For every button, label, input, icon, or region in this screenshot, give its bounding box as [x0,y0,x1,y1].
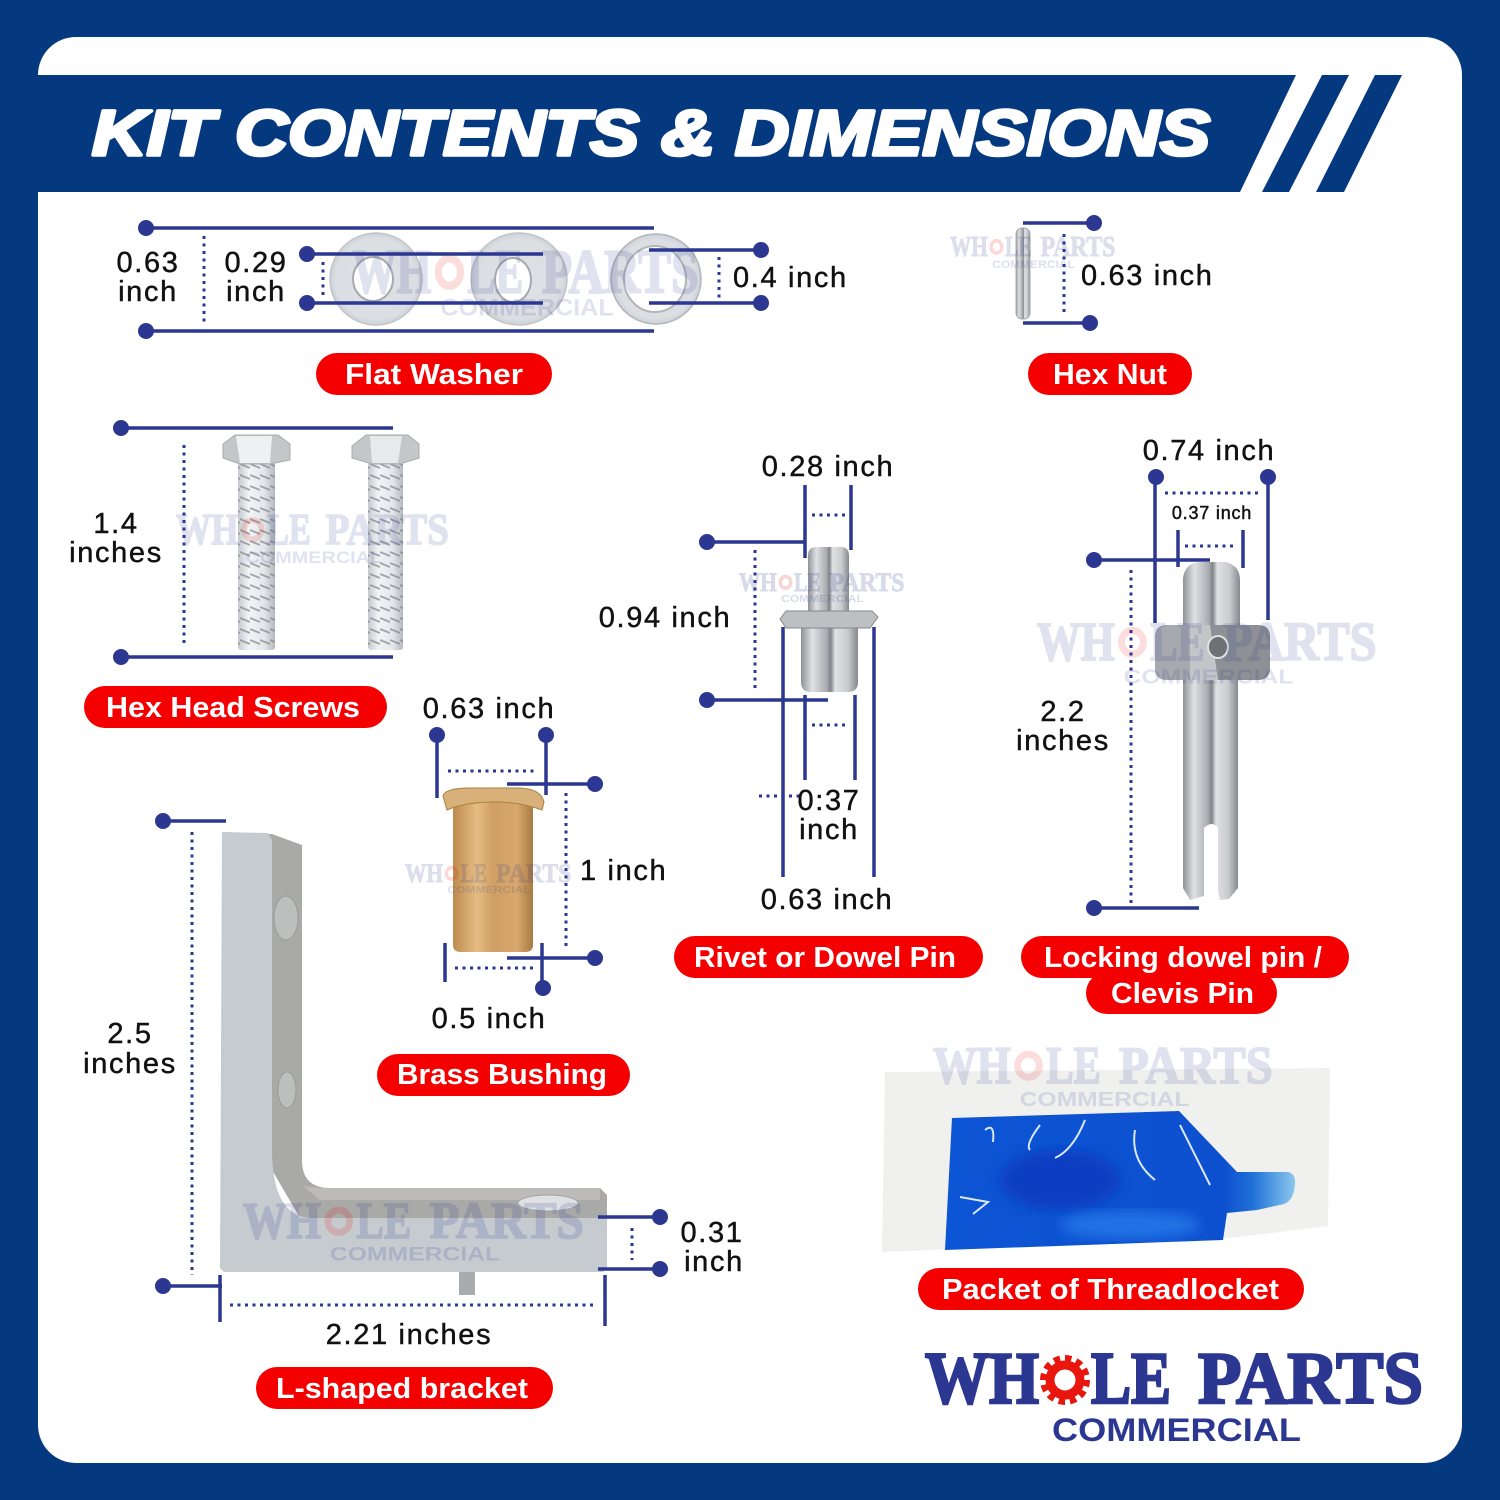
label: flat washer: Flat Washer [345,359,523,391]
watermark: locking pin: COMMERCIAL [1124,666,1293,689]
watermark: bushing: PARTS [496,858,571,888]
dimensions: flat washer [116,220,848,339]
dimensions: hex head screws: 1.4 [93,508,139,540]
banner band [38,75,1296,192]
watermark: locking pin: WH [1037,612,1115,672]
part photo: flat washers [330,233,701,325]
logo: Whole Parts Commercial: WH [925,1338,1039,1420]
dimensions: L-shaped bracket: 2.21 inches [326,1319,492,1351]
dimensions: rivet or dowel pin: inch [799,814,859,846]
label: packet of threadlocket: Packet of Threadlocket [942,1274,1279,1306]
watermark: hex nut [950,230,1115,271]
watermark: rivet: LE [794,567,821,597]
watermark: packet: LE [1046,1037,1101,1095]
label: rivet or dowel pin [674,936,983,978]
watermark: rivet: COMMERCIAL [781,593,864,605]
title [92,97,1210,169]
dimensions: locking dowel pin: 2.2 [1040,696,1086,728]
title: KIT [92,97,220,169]
label: L-shaped bracket [256,1367,553,1409]
watermark: packet [933,1037,1273,1111]
watermark: rivet: PARTS [830,567,904,597]
dimensions: locking dowel pin [1016,435,1276,916]
dimensions: L-shaped bracket: inches [83,1048,177,1080]
part photo: L-shaped bracket [220,832,607,1295]
watermark: locking pin: LE [1150,612,1205,672]
dimensions: locking dowel pin: 0.74 inch [1143,435,1275,467]
dimensions: flat washer: inch [118,276,178,308]
watermark: hex nut: WH [950,230,988,262]
banner stripes [1262,75,1402,192]
dimensions: flat washer: 0.29 [224,247,288,279]
label: hex head screws: Hex Head Screws [106,692,360,724]
watermark: flat washers: LE [468,238,523,307]
watermark: packet: PARTS [1119,1037,1273,1095]
part photo: hex nut pin [1016,228,1030,319]
label: L-shaped bracket: L-shaped bracket [276,1373,528,1405]
watermark: bracket [243,1192,584,1265]
dimensions: rivet or dowel pin: 0.28 inch [762,451,894,483]
label: flat washer [316,353,552,395]
label: locking dowel pin / clevis pin [1021,936,1349,1014]
dimensions: hex nut [1023,215,1214,331]
watermark: bushing [405,858,571,896]
logo: Whole Parts Commercial [925,1338,1423,1448]
dimensions: brass bushing: 1 inch [580,855,667,887]
watermark: flat washers: WH [352,238,431,307]
part photo: locking dowel pin [1155,562,1270,900]
dimensions: hex head screws [69,420,393,665]
label: rivet or dowel pin: Rivet or Dowel Pin [694,942,956,974]
part photo: rivet or dowel pin [780,547,878,692]
dimensions: rivet or dowel pin: 0.63 inch [761,884,893,916]
watermark: screws: PARTS [326,505,449,554]
watermark: locking pin [1037,612,1377,689]
watermark: bracket: LE [357,1192,411,1250]
label: locking dowel pin / clevis pin: Locking dowel pin / [1044,942,1322,974]
dimensions: rivet or dowel pin: 0:37 [797,785,861,817]
watermark: screws: LE [267,505,311,554]
dimensions: hex nut: 0.63 inch [1081,260,1214,292]
dimensions: L-shaped bracket: 0.31 [680,1217,744,1249]
title: & [661,97,715,169]
dimensions: brass bushing: 0.63 inch [423,693,555,725]
watermark: rivet: WH [739,567,777,597]
dimensions: locking dowel pin: inches [1016,725,1110,757]
watermark: hex nut: LE [1005,230,1032,262]
dimensions: L-shaped bracket [83,813,744,1351]
dimensions: flat washer: 0.4 inch [733,262,848,294]
watermark: flat washers: PARTS [542,238,699,307]
watermark: bushing: LE [460,858,487,888]
watermark: packet: COMMERCIAL [1020,1089,1189,1111]
logo: Whole Parts Commercial: LE [1091,1338,1171,1420]
watermark: screws: WH [176,505,238,554]
dimensions: L-shaped bracket: inch [684,1246,744,1278]
icon: gear [1043,1358,1087,1402]
title: CONTENTS [235,97,639,169]
watermark: flat washers: COMMERCIAL [440,294,614,321]
watermark: hex nut: COMMERCIAL [992,260,1075,271]
watermark: bracket: WH [243,1192,321,1250]
label: packet of threadlocket [918,1268,1304,1310]
dimensions: brass bushing: 0.5 inch [432,1003,546,1035]
dimensions: L-shaped bracket: 2.5 [107,1018,153,1050]
dimensions: rivet or dowel pin [599,451,894,916]
watermark: packet: WH [933,1037,1011,1095]
title: DIMENSIONS [735,97,1210,169]
watermark: bushing: COMMERCIAL [447,885,531,896]
dimensions: locking dowel pin: 0.37 inch [1172,503,1252,523]
part photo: hex head screws [223,435,419,650]
watermark: locking pin: PARTS [1223,612,1377,672]
dimensions: brass bushing [423,693,667,1035]
watermark: bracket: COMMERCIAL [330,1243,500,1265]
label: hex nut [1028,353,1192,395]
label: locking dowel pin / clevis pin: Clevis Pin [1111,978,1254,1010]
dimensions: flat washer: inch [226,276,286,308]
logo: Whole Parts Commercial: COMMERCIAL [1052,1412,1301,1448]
part photo: brass bushing [443,788,544,952]
label: hex nut: Hex Nut [1053,359,1167,391]
label: brass bushing: Brass Bushing [397,1059,607,1091]
dimensions: flat washer: 0.63 [116,247,180,279]
part photo: packet of threadlocker [882,1068,1330,1252]
watermark: bracket: PARTS [430,1192,584,1250]
header banner [38,75,1402,192]
watermark: hex nut: PARTS [1041,230,1115,262]
watermark: rivet [739,567,904,605]
dimensions: hex head screws: inches [69,537,163,569]
logo: Whole Parts Commercial: PARTS [1198,1338,1423,1420]
watermark: screws: COMMERCIAL [246,549,382,567]
label: hex head screws [84,686,387,728]
dimensions: rivet or dowel pin: 0.94 inch [599,602,731,634]
watermark: screws [176,505,449,567]
label: brass bushing [377,1054,630,1096]
watermark: bushing: WH [405,858,443,888]
watermark: flat washers [352,238,699,321]
